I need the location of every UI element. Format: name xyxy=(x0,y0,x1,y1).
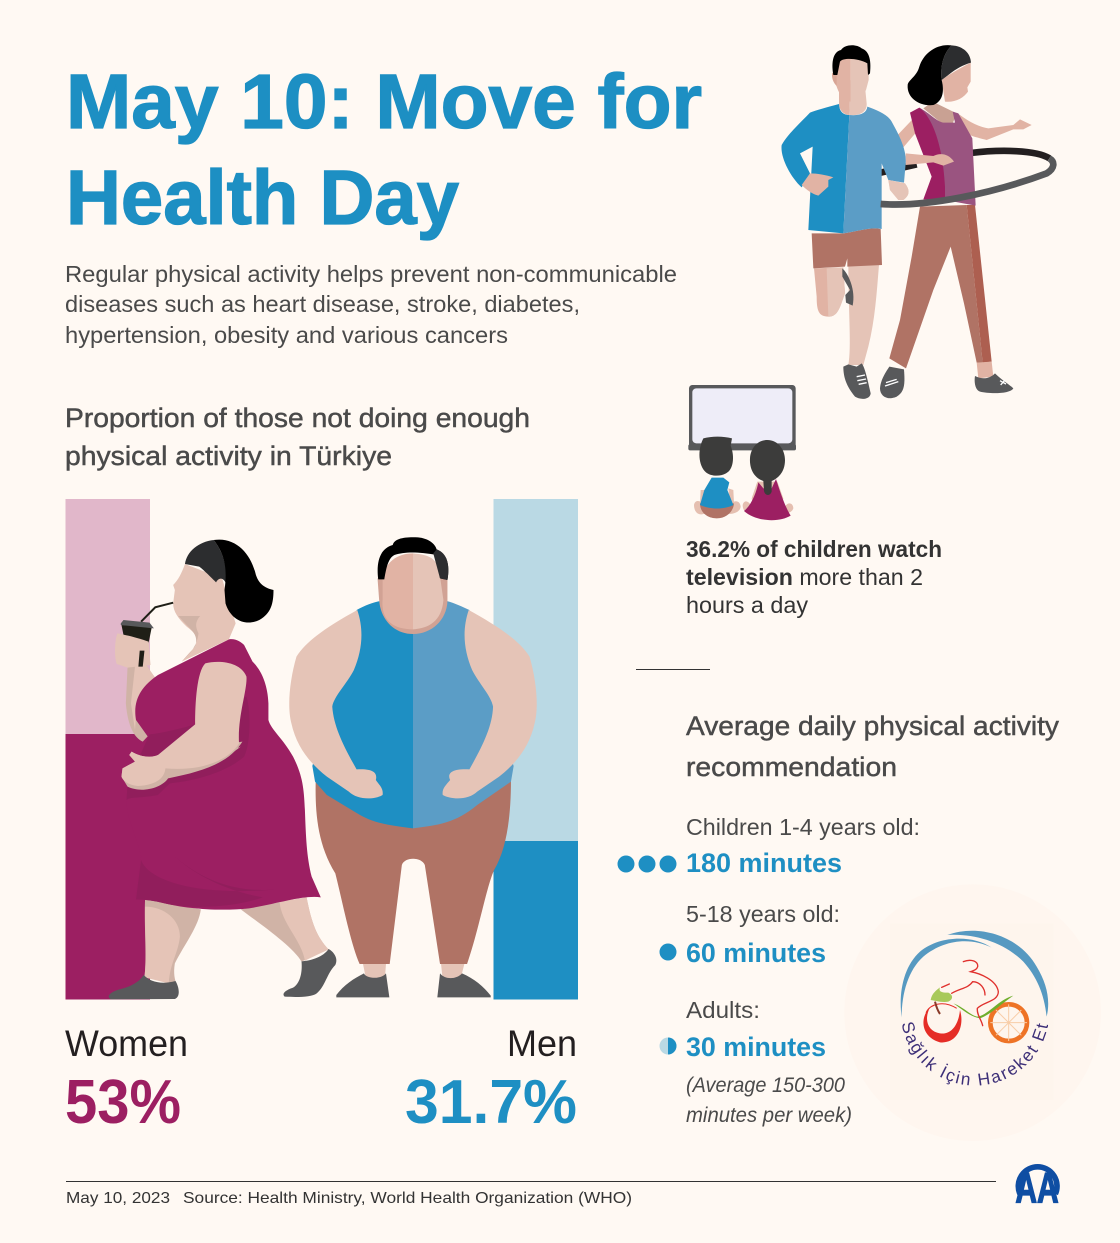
dress xyxy=(127,639,321,910)
bar: men 31.7% xyxy=(494,499,578,1000)
woman xyxy=(880,45,1032,398)
trousers xyxy=(316,780,511,964)
heading: recommendation: Average daily physical activity xyxy=(686,711,1060,741)
cup, straw, hand xyxy=(141,603,173,622)
footer rule xyxy=(66,1180,996,1182)
illustration: man xyxy=(289,537,537,997)
face and neck xyxy=(173,564,236,662)
icon: three dots xyxy=(618,856,676,872)
recommendation: adults xyxy=(660,997,852,1127)
logo: Sağlık İçin Hareket Et xyxy=(900,930,1048,1086)
legs xyxy=(144,898,201,984)
text: children television: hours a day xyxy=(686,592,808,618)
recommendation: adults: Adults: xyxy=(686,997,760,1023)
bar: women 53% xyxy=(66,499,150,1000)
recommendation: children 1-4 years: 180 minutes xyxy=(686,848,842,878)
value: men 31.7%: 31.7% xyxy=(405,1068,577,1137)
recommendation: children 1-4 years xyxy=(618,814,920,878)
arm over belly xyxy=(163,747,241,778)
label: men: Men xyxy=(507,1023,577,1064)
subheading: proportion in Türkiye: Proportion of those not doing enough xyxy=(65,403,530,433)
intro text: diseases such as heart disease, stroke, diabetes, xyxy=(65,291,580,317)
boy xyxy=(694,437,741,518)
note: weekly average: (Average 150-300 xyxy=(686,1073,845,1097)
ankles and shoes xyxy=(363,964,386,979)
recommendation: 5-18 years xyxy=(660,901,840,968)
subheading: proportion in Türkiye xyxy=(65,403,530,471)
icon: half dot xyxy=(660,1038,676,1054)
girl xyxy=(743,440,793,520)
source line: Source: Health Ministry, World Health Organization (WHO) xyxy=(183,1190,632,1207)
recommendation: adults: 30 minutes xyxy=(686,1032,826,1062)
illustration: running man and woman with hula hoop xyxy=(781,45,1053,399)
illustration: woman with drink xyxy=(109,540,336,999)
shirt xyxy=(312,601,413,828)
heading: recommendation xyxy=(686,711,1060,782)
title xyxy=(66,59,702,241)
hoop back xyxy=(881,151,1049,173)
intro text xyxy=(65,261,677,348)
title: May 10: Move for xyxy=(66,59,702,145)
value: women 53%: 53% xyxy=(65,1068,181,1137)
logo: AA: AA xyxy=(1015,1165,1059,1213)
label: women: Women xyxy=(65,1023,188,1064)
note: weekly average: minutes per week) xyxy=(686,1103,852,1127)
source line: May 10, 2023 xyxy=(66,1190,170,1207)
intro text: hypertension, obesity and various cancers xyxy=(65,322,508,348)
icon: one dot xyxy=(660,944,676,960)
illustration: children watching television xyxy=(688,385,796,520)
recommendation: 5-18 years: 5-18 years old: xyxy=(686,901,840,927)
hair xyxy=(378,537,448,580)
cup arm xyxy=(126,665,156,742)
text: children television: 36.2% of children watch xyxy=(686,536,942,562)
recommendation: children 1-4 years: Children 1-4 years old: xyxy=(686,814,920,840)
intro text: Regular physical activity helps prevent non-communicable xyxy=(65,261,677,287)
hoop front xyxy=(881,158,1053,204)
heading: recommendation: recommendation xyxy=(686,752,897,782)
bar chart: women and men xyxy=(66,499,578,1000)
text: children television: television more than 2 xyxy=(686,564,923,590)
hair xyxy=(185,540,227,585)
arms xyxy=(289,610,383,798)
label: men xyxy=(405,1023,577,1137)
recommendation: 5-18 years: 60 minutes xyxy=(686,938,826,968)
head xyxy=(378,578,447,634)
label: women xyxy=(65,1023,188,1137)
logo text: Sağlık İçin Hareket Et xyxy=(902,1022,1048,1086)
subheading: proportion in Türkiye: physical activity in Türkiye xyxy=(65,441,392,471)
text: children television xyxy=(686,536,942,618)
title: Health Day xyxy=(66,155,459,241)
note: weekly average xyxy=(686,1073,852,1127)
man xyxy=(781,45,909,399)
